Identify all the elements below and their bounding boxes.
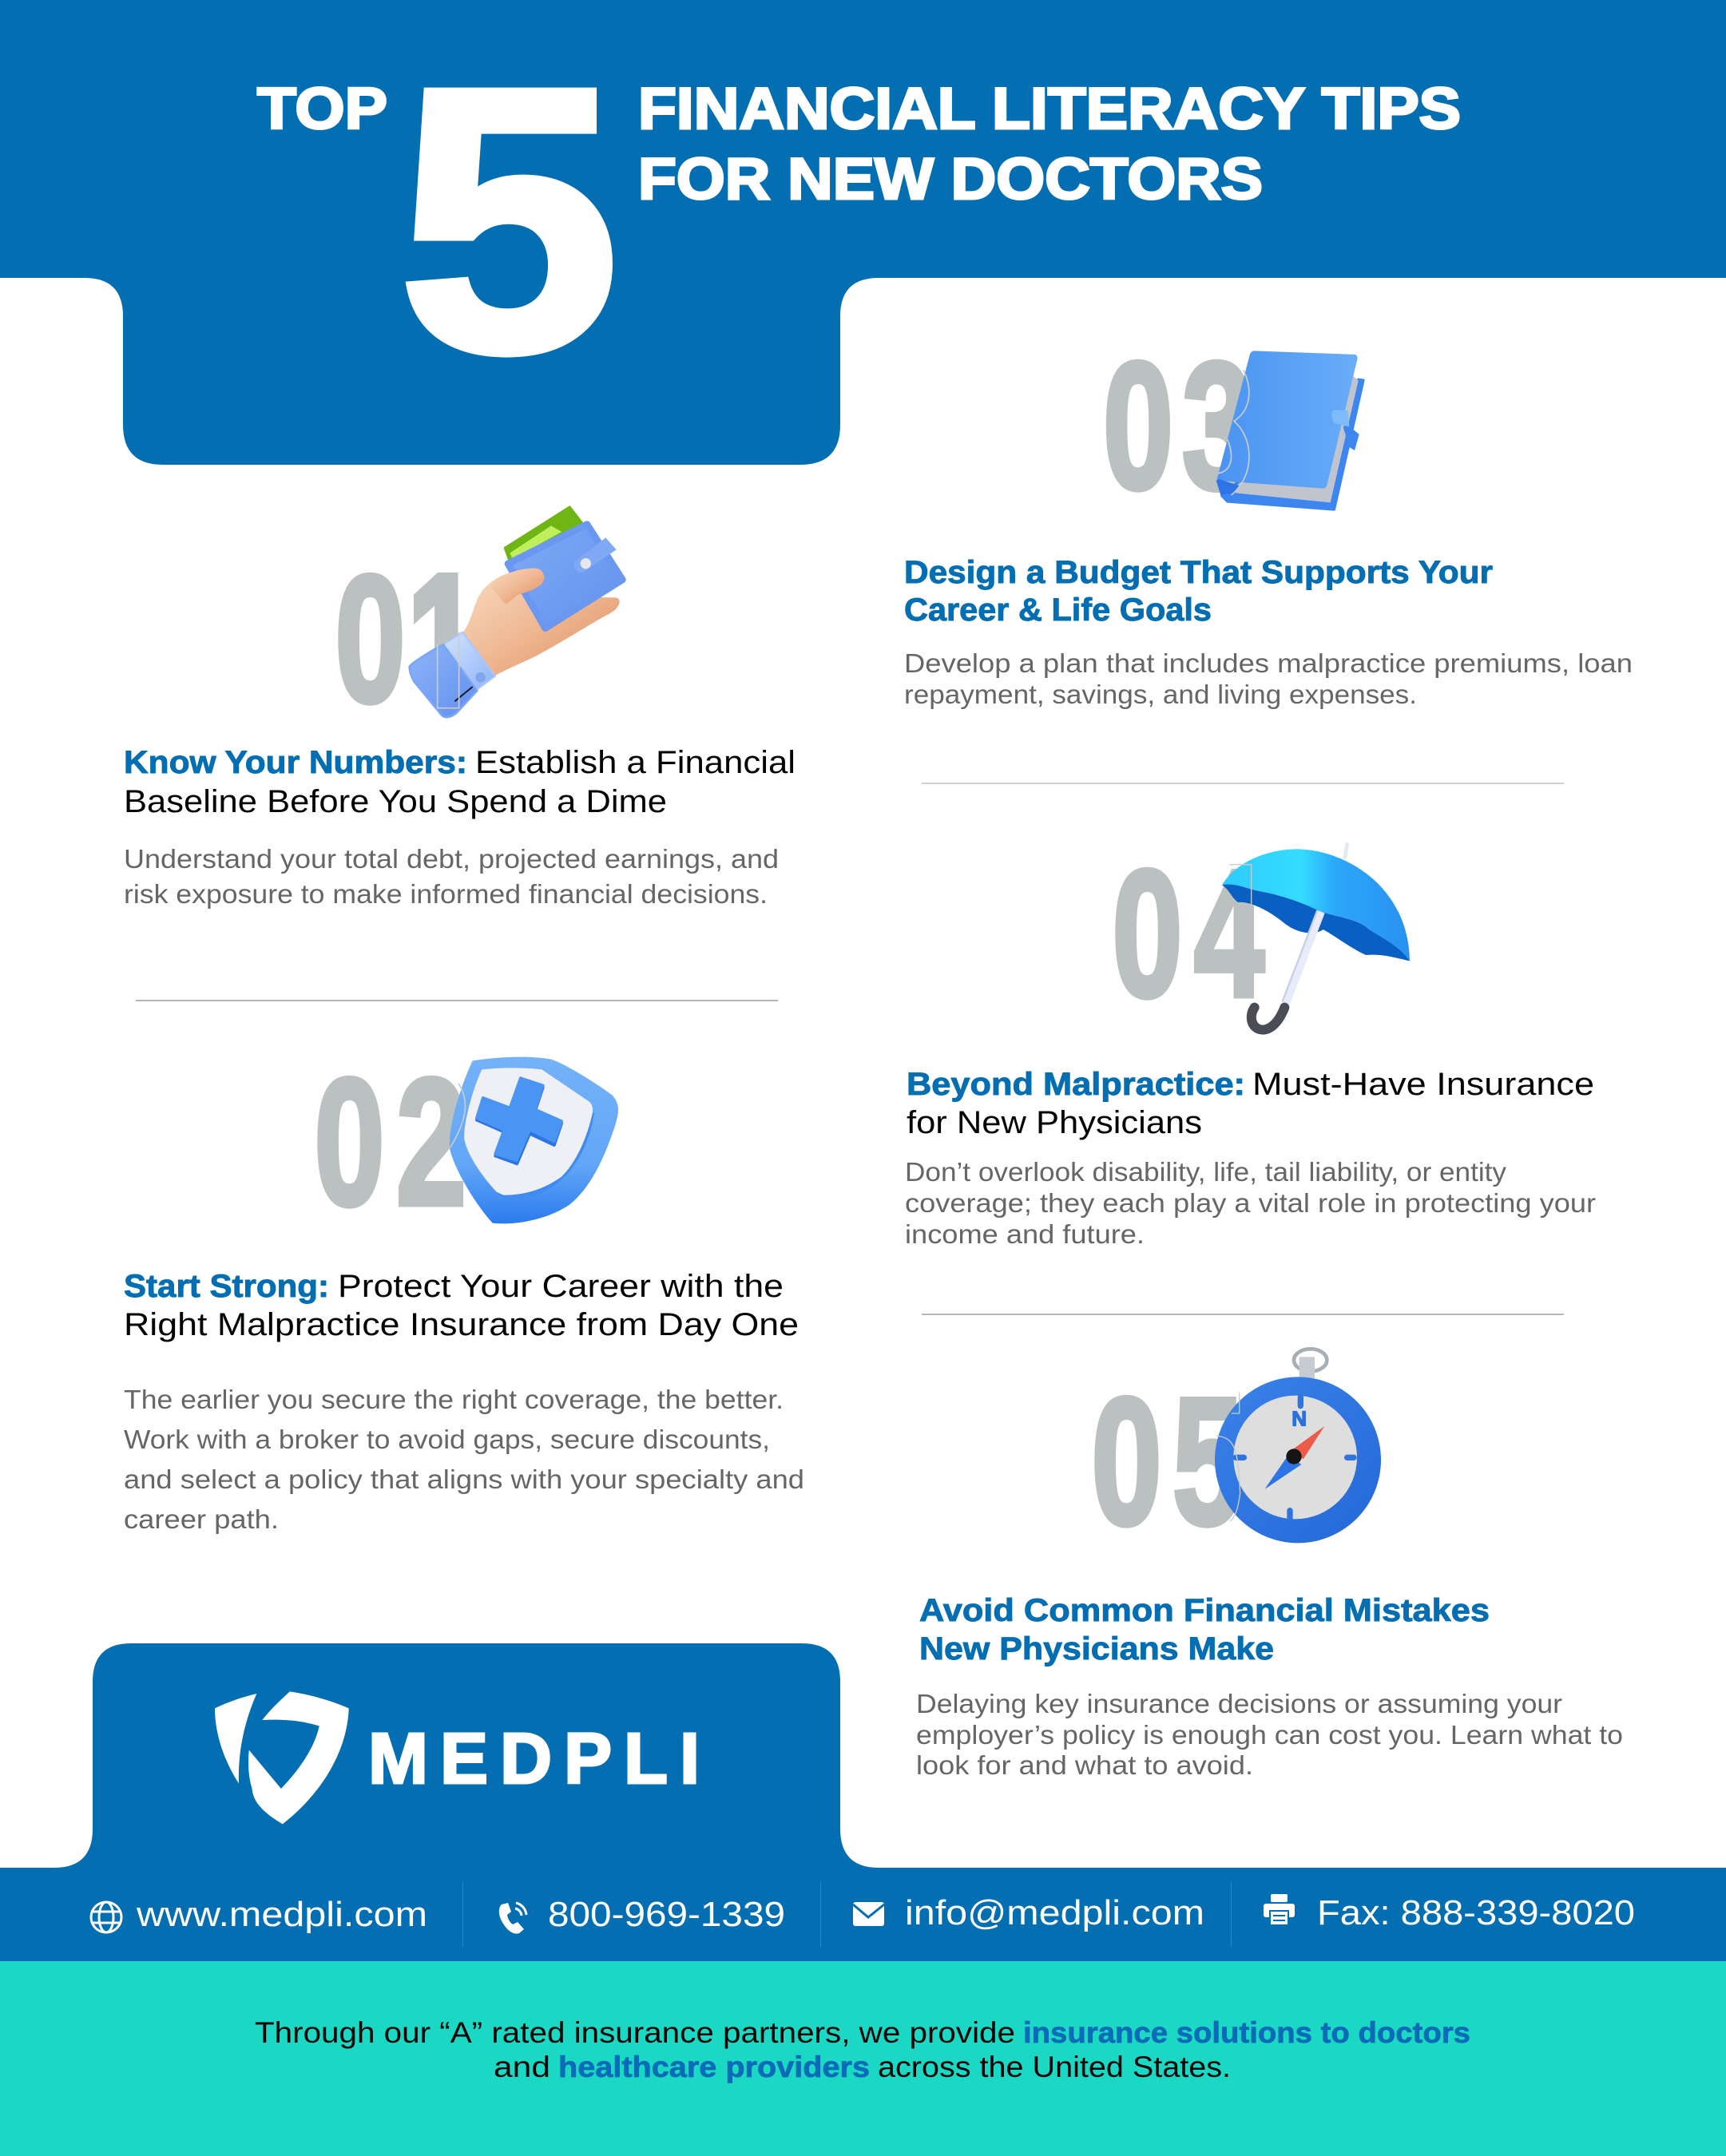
body text [905,1157,1596,1249]
number 02 [315,1041,466,1243]
heading line 1 rest: Establish a Financial [475,745,796,780]
body text: employer’s policy is enough can cost you. Learn what to [916,1720,1623,1750]
body text: risk exposure to make informed financial decisions. [124,879,768,909]
closing statement: Through our “A” rated insurance partners, we provide [255,2016,1015,2049]
number 05: 5 [1172,1361,1243,1563]
number 04 [1113,833,1264,1035]
teal bottom band [0,1961,1726,2156]
heading line 1 lead: Start Strong: [124,1269,329,1304]
top header band with tab [0,0,1726,465]
contact: phone: 800-969-1339 [548,1895,785,1934]
icon: umbrella [1222,844,1410,1030]
icon: logo shield [215,1691,349,1824]
panel: tip 3 [904,325,1633,709]
number 01: 0 [335,538,405,740]
closing statement [255,2016,1470,2083]
panel: tip 5 [916,1349,1623,1780]
contact: email: info@medpli.com [905,1893,1204,1932]
heading line 2: Baseline Before You Spend a Dime [124,784,667,819]
body text: career path. [124,1504,279,1534]
icon: envelope [853,1902,884,1926]
closing statement: insurance solutions to doctors [1023,2016,1470,2049]
icon: compass [1215,1349,1381,1543]
contact row [91,1893,1635,1934]
body text [904,648,1633,709]
title [257,10,1461,430]
body text: repayment, savings, and living expenses. [904,680,1417,709]
body text: income and future. [905,1219,1145,1249]
heading line 1 rest: Must-Have Insurance [1252,1067,1594,1102]
heading line 1 lead: Beyond Malpractice: [907,1067,1245,1102]
closing statement: and [494,2051,550,2083]
heading line 2: Right Malpractice Insurance from Day One [124,1307,799,1342]
number 02: 2 [396,1041,466,1243]
number 03: 3 [1182,325,1252,527]
body text: Don’t overlook disability, life, tail liability, or entity [905,1157,1507,1187]
body text [124,1385,804,1534]
body text: coverage; they each play a vital role in protecting your [905,1188,1596,1218]
icon: shield with cross [450,1057,618,1223]
icon: globe [91,1902,121,1932]
icon: fax machine [1264,1894,1295,1925]
heading line 1 lead: Know Your Numbers: [124,745,467,780]
heading line 2: Career & Life Goals [904,593,1212,628]
body text [124,844,779,909]
number 03: 0 [1103,325,1173,527]
number 01: 1 [408,538,478,740]
number 03 [1103,325,1252,527]
number 01 [338,572,458,706]
icon: phone [499,1903,526,1934]
panel: tip 2 [124,1041,804,1534]
closing statement: across the United States. [878,2051,1231,2083]
body text: The earlier you secure the right coverage, the better. [124,1385,784,1414]
logo [215,1691,700,1824]
body text: Work with a broker to avoid gaps, secure discounts, [124,1425,770,1454]
contact: fax: Fax: 888-339-8020 [1317,1893,1635,1932]
big number 5: 5 [398,10,620,430]
body text: Delaying key insurance decisions or assuming your [916,1689,1562,1718]
title line 2: FOR NEW DOCTORS [638,147,1263,212]
panel: tip 1 [124,506,796,909]
number 05: 0 [1092,1361,1161,1563]
number 04: 4 [1194,833,1264,1035]
logo wordmark: MEDPLI [368,1719,700,1799]
icon: hand holding wallet [410,506,622,717]
body text: and select a policy that aligns with your specialty and [124,1464,804,1494]
footer blue band with logo tab [0,1643,1726,1961]
title word: top: TOP [257,77,387,141]
heading line 2: for New Physicians [907,1105,1202,1140]
contact: website: www.medpli.com [136,1895,427,1934]
panel: tip 4 [905,833,1596,1249]
heading line 2: New Physicians Make [919,1631,1274,1667]
number 05 [1092,1361,1243,1563]
number 02: 0 [315,1041,384,1243]
body text: Develop a plan that includes malpractice premiums, loan [904,648,1633,678]
closing statement: healthcare providers [558,2051,870,2083]
number 04: 0 [1113,833,1182,1035]
heading line 1: Design a Budget That Supports Your [904,555,1493,590]
heading line 1 rest: Protect Your Career with the [338,1269,784,1304]
heading line 1: Avoid Common Financial Mistakes [919,1593,1490,1628]
body text [916,1689,1623,1780]
icon: blue book [1216,351,1363,509]
body text: look for and what to avoid. [916,1750,1253,1780]
title line 1: FINANCIAL LITERACY TIPS [638,77,1461,141]
icon: compass: N [1292,1407,1307,1431]
body text: Understand your total debt, projected earnings, and [124,844,779,874]
